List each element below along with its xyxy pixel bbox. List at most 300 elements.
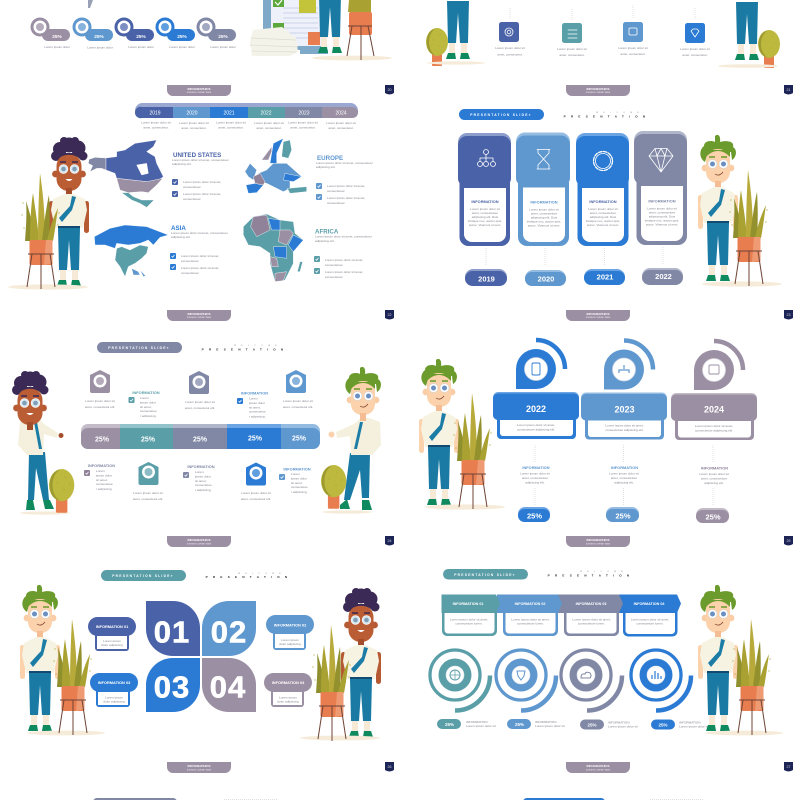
info box 1: Lorem ipsum dolor sit amet, bbox=[450, 618, 488, 622]
info text 1: amet, consectetuer bbox=[522, 476, 548, 480]
petal 03 bbox=[146, 658, 200, 712]
arrow 4: INFORMATION 04 bbox=[634, 602, 665, 606]
year pill 2019 bbox=[465, 269, 507, 286]
captions above and below: amet, consectetur elit. bbox=[283, 405, 313, 409]
information block bottom 1: r adipiscing. bbox=[96, 487, 113, 491]
heading text bbox=[564, 112, 650, 118]
card 2022: purus. Vivamus ut sem. bbox=[646, 222, 678, 226]
information block top 2: r adipiscing. bbox=[249, 414, 266, 418]
icon tile 4: Lorem ipsum dolor sit bbox=[680, 47, 710, 51]
footer tab bbox=[566, 310, 630, 321]
icon pill 1 bbox=[30, 18, 70, 41]
percent pill 2 bbox=[606, 507, 639, 522]
block: africa: consectetuer. bbox=[325, 263, 344, 267]
timeline captions: amet, consectetur. bbox=[143, 126, 169, 130]
panel: slide 24 percentage bar bbox=[12, 342, 394, 547]
information block top 1: r adipiscing. bbox=[140, 414, 157, 418]
icon tile 3 bbox=[618, 5, 648, 56]
year pill 2019: 2019 bbox=[478, 274, 495, 284]
panel: slide 22 world maps bbox=[8, 103, 394, 321]
heading pill: PRESENTATION SLIDE» bbox=[112, 574, 174, 578]
partial next slide headers bbox=[93, 798, 704, 800]
ring 1 bbox=[430, 650, 490, 710]
card 2022 bbox=[634, 131, 687, 245]
shadow left bbox=[427, 61, 485, 65]
arrow 1: INFORMATION 01 bbox=[453, 602, 483, 606]
block: europe: EUROPE bbox=[317, 155, 343, 162]
information block top 2: ipsum dolor bbox=[249, 401, 265, 405]
heading pill bbox=[443, 569, 528, 580]
info text 3 bbox=[699, 466, 729, 485]
info box 02: INFORMATION 02 bbox=[274, 622, 307, 628]
timeline captions: Lorem ipsum dolor sit bbox=[288, 120, 318, 124]
block: africa: AFRICA bbox=[315, 228, 339, 236]
year timeline bar: 2024 bbox=[335, 110, 347, 116]
block: africa bbox=[314, 228, 372, 279]
year box 2022 bbox=[493, 392, 579, 439]
percent label 2: Lorem ipsum dolor sit bbox=[535, 724, 565, 728]
info text 3: Lorem ipsum dolor sit bbox=[699, 472, 729, 476]
information block bottom 3: sit amet, bbox=[291, 481, 303, 485]
card 2019: amet, consectetuer bbox=[472, 211, 498, 215]
footer tab bbox=[167, 310, 231, 321]
year box 2023 bbox=[581, 392, 667, 440]
icon tile 1 bbox=[495, 8, 525, 56]
block: asia: Lorem ipsum dolor sit amet, consectetuer bbox=[171, 231, 228, 235]
plant bbox=[27, 619, 105, 735]
captions above and below: Lorem ipsum dolor sit bbox=[85, 399, 115, 403]
footer tab: BUSINESS COMPANY NAME bbox=[586, 768, 611, 772]
footer tab: INFOGRAPHICS bbox=[586, 764, 610, 768]
info box 4 bbox=[623, 600, 678, 636]
year timeline bar: 2021 bbox=[223, 110, 235, 116]
card 2019: INFORMATION bbox=[471, 199, 499, 204]
page badge bbox=[385, 762, 394, 772]
petal 01: 01 bbox=[154, 614, 190, 650]
page badge: 21 bbox=[786, 88, 790, 92]
hex icon 3 bbox=[286, 370, 306, 393]
icon pill 4 bbox=[156, 18, 195, 41]
information block bottom 2 bbox=[183, 464, 215, 492]
heading text: WELCOME bbox=[238, 573, 286, 575]
block: africa: Lorem ipsum dolor sit amet, bbox=[325, 270, 363, 274]
block: europe: adipiscing elit. bbox=[316, 165, 336, 169]
icon tile 4: amet, consectetur. bbox=[682, 53, 708, 57]
icon pill 5: 25% bbox=[218, 34, 229, 40]
block: asia bbox=[170, 225, 228, 275]
info box 3 bbox=[564, 600, 619, 636]
info text 3: adipiscing elit. bbox=[704, 481, 724, 485]
block: united states: Lorem ipsum dolor sit amet, bbox=[183, 180, 221, 184]
card 2019: tristique nec, auctor quis, bbox=[468, 219, 502, 223]
connectors bbox=[486, 247, 663, 266]
cactus left bbox=[49, 469, 74, 513]
year box 2023: Lorem ipsum dolor sit amet, bbox=[605, 424, 644, 428]
card 2022: tristique nec, auctor quis, bbox=[645, 218, 679, 222]
information block bottom 1: Lorem bbox=[96, 469, 105, 473]
information block bottom 2: INFORMATION bbox=[187, 464, 215, 469]
captions above and below: amet, consectetur elit. bbox=[185, 406, 215, 410]
info box 01 bbox=[88, 617, 136, 651]
marker 2023 bbox=[604, 340, 653, 390]
card 2020 bbox=[516, 132, 570, 246]
heading text: WELCOME bbox=[234, 345, 282, 347]
year pill 2021: 2021 bbox=[597, 272, 613, 282]
information block top 1 bbox=[128, 390, 160, 418]
icon pill 1: 25% bbox=[52, 34, 63, 40]
character: dark boy pointing bbox=[12, 371, 70, 515]
panel: slide 21 icons bbox=[426, 1, 793, 96]
block: europe: Lorem ipsum dolor sit amet, consectetuer bbox=[316, 161, 373, 165]
info text 1: INFORMATION bbox=[522, 465, 550, 470]
petal 01 bbox=[146, 601, 200, 656]
year box 2024: consectetuer adipiscing elit. bbox=[695, 428, 733, 432]
percent pill 3: 25% bbox=[705, 512, 721, 522]
block: africa: adipiscing elit. bbox=[315, 239, 335, 243]
footer tab: BUSINESS COMPANY NAME bbox=[187, 91, 212, 94]
page badge: 20 bbox=[388, 88, 392, 92]
icon tile 3: Lorem ipsum dolor sit bbox=[618, 46, 648, 50]
information block bottom 1: INFORMATION bbox=[88, 463, 115, 468]
year timeline bar bbox=[135, 103, 358, 118]
info box 4: consectetuer lorem. bbox=[636, 622, 664, 626]
character legs bbox=[318, 0, 342, 53]
information block bottom 3: consectetue bbox=[291, 485, 308, 489]
heading text: PRESENTATION bbox=[202, 348, 288, 352]
panel: slide 23 year cards bbox=[458, 109, 793, 321]
card 2021: INFORMATION bbox=[589, 199, 617, 204]
block: europe: Lorem ipsum dolor sit amet, bbox=[327, 196, 365, 200]
block: united states: Lorem ipsum dolor sit amet, bbox=[183, 192, 221, 196]
percent label 4 bbox=[651, 720, 709, 730]
card 2020: tristique nec, auctor quis, bbox=[527, 220, 561, 224]
percent pill 1: 25% bbox=[527, 512, 542, 520]
footer tab: BUSINESS COMPANY NAME bbox=[586, 316, 611, 319]
panel: slide 27 arrows and rings bbox=[430, 569, 793, 773]
percent label 1: Lorem ipsum dolor sit bbox=[466, 724, 496, 728]
information block top 1: Lorem bbox=[140, 396, 149, 400]
info box 3: Lorem ipsum dolor sit amet, bbox=[572, 618, 611, 622]
year box 2024 bbox=[671, 393, 757, 440]
info text 2: INFORMATION bbox=[611, 465, 638, 470]
year pill 2020: 2020 bbox=[538, 274, 554, 284]
character: dark-haired boy bbox=[49, 137, 89, 286]
block: united states: Lorem ipsum dolor sit amet, consectetuer bbox=[172, 158, 229, 162]
card 2019: Lorem ipsum dolor sit bbox=[470, 207, 500, 211]
percent label 1: INFORMATION bbox=[466, 720, 487, 724]
page badge: 27 bbox=[786, 765, 790, 769]
info box 04: dolor adipiscing bbox=[277, 700, 299, 704]
captions: Lorem ipsum dolor bbox=[87, 46, 113, 50]
captions above and below: amet, consectetur elit. bbox=[133, 497, 163, 501]
card 2022: Lorem ipsum dolor sit bbox=[647, 206, 677, 210]
captions above and below: Lorem ipsum dolor sit bbox=[241, 491, 271, 495]
timeline captions: Lorem ipsum dolor sit bbox=[141, 120, 171, 124]
stacked percent bar: 25% bbox=[292, 436, 307, 442]
ring 4 bbox=[631, 650, 691, 710]
block: europe: consectetuer. bbox=[327, 201, 346, 205]
percent label 1 bbox=[437, 719, 496, 729]
info text 3: INFORMATION bbox=[701, 466, 728, 470]
information block bottom 2: r adipiscing. bbox=[195, 488, 212, 492]
icon pill 2: 25% bbox=[94, 34, 105, 40]
panel: slide 25 year headers bbox=[419, 340, 793, 547]
information block bottom 2: sit amet, bbox=[195, 479, 207, 483]
information block bottom 2: consectetue bbox=[195, 483, 212, 487]
information block bottom 1: sit amet, bbox=[96, 478, 108, 482]
card 2019: adipiscing elit. Duis bbox=[472, 215, 499, 219]
icon tile 3: amet, consectetur. bbox=[620, 52, 646, 56]
card 2022: INFORMATION bbox=[648, 198, 676, 204]
captions above and below: Lorem ipsum dolor sit bbox=[185, 400, 215, 404]
hex icon 4 bbox=[138, 462, 158, 485]
illustration: clipboard, paper stack bbox=[250, 0, 328, 56]
captions bbox=[44, 45, 236, 50]
page badge bbox=[385, 85, 394, 94]
block: asia: Lorem ipsum dolor sit amet, bbox=[181, 254, 219, 258]
year pill 2022 bbox=[642, 268, 683, 285]
captions above and below: Lorem ipsum dolor sit bbox=[283, 399, 313, 403]
card 2021: tristique nec, auctor quis, bbox=[586, 219, 620, 223]
marker 2022 bbox=[516, 340, 565, 389]
block: europe bbox=[316, 155, 373, 205]
decorative map fragment bbox=[88, 0, 93, 8]
page badge: 25 bbox=[786, 539, 790, 543]
percent label 4: Lorem ipsum dolor sit bbox=[679, 724, 709, 728]
icon pill 4: 25% bbox=[177, 34, 188, 40]
page badge: 24 bbox=[388, 539, 392, 543]
character: green boy bbox=[20, 585, 60, 731]
percent label 3: 25% bbox=[587, 722, 597, 728]
petal 04 bbox=[202, 658, 256, 712]
card 2021: purus. Vivamus ut sem. bbox=[587, 223, 619, 227]
petal 04: 04 bbox=[210, 670, 246, 704]
info box 01: Lorem ipsum bbox=[103, 639, 121, 643]
timeline captions: amet, consectetur. bbox=[218, 126, 244, 130]
footer tab bbox=[566, 85, 630, 96]
page badge: 23 bbox=[786, 313, 790, 317]
character: green-haired boy bbox=[698, 135, 738, 281]
captions: Lorem ipsum dolor bbox=[44, 45, 70, 49]
heading text bbox=[548, 571, 634, 578]
info text 2: adipiscing elit. bbox=[614, 480, 634, 484]
arrow 2 bbox=[497, 594, 562, 613]
information block top 2: Lorem bbox=[249, 396, 258, 400]
info text 2: amet, consectetuer bbox=[611, 476, 637, 480]
stacked percent bar: 25% bbox=[193, 436, 208, 444]
stacked percent bar: 25% bbox=[248, 436, 263, 442]
shadow right bbox=[718, 64, 778, 68]
block: europe: consectetuer. bbox=[327, 189, 346, 193]
heading text bbox=[206, 573, 292, 579]
plant on stand bbox=[312, 0, 392, 60]
captions above and below bbox=[85, 399, 313, 501]
timeline captions: amet, consectetur. bbox=[290, 126, 316, 130]
timeline captions: amet, consectetur. bbox=[328, 126, 354, 130]
card 2022: adipiscing elit. Duis bbox=[649, 214, 676, 218]
footer tab bbox=[566, 762, 630, 773]
year box 2024: 2024 bbox=[704, 404, 724, 414]
info box 2: consectetuer lorem. bbox=[517, 622, 544, 626]
panel: slide 20 progress circles bbox=[30, 0, 394, 96]
card 2021: adipiscing elit. Duis bbox=[590, 215, 617, 219]
card 2019 bbox=[458, 133, 511, 246]
percent label 1: 25% bbox=[445, 722, 454, 727]
block: united states: consectetuer. bbox=[183, 185, 202, 189]
information block bottom 2: ipsum dolor bbox=[195, 474, 211, 478]
footer tab: INFOGRAPHICS bbox=[586, 538, 610, 542]
block: africa: Lorem ipsum dolor sit amet, consectetuer bbox=[315, 234, 372, 238]
arrow 1 bbox=[442, 594, 500, 613]
ring 2 bbox=[496, 650, 556, 710]
hex icon 5 bbox=[246, 462, 266, 486]
footer tab: BUSINESS COMPANY NAME bbox=[187, 316, 212, 319]
footer tab: INFOGRAPHICS bbox=[586, 312, 610, 316]
arrow 4 bbox=[618, 594, 681, 613]
info text 2: Lorem ipsum dolor sit bbox=[609, 472, 639, 476]
footer tab: INFOGRAPHICS bbox=[187, 312, 211, 316]
captions: Lorem ipsum dolor bbox=[128, 45, 154, 49]
year timeline bar: 2022 bbox=[260, 110, 272, 116]
information block top 1: INFORMATION bbox=[132, 390, 160, 395]
heading pill bbox=[97, 342, 182, 353]
info box 04: INFORMATION 04 bbox=[272, 680, 305, 685]
year box 2023: 2023 bbox=[614, 404, 635, 414]
footer tab: BUSINESS COMPANY NAME bbox=[187, 542, 212, 546]
percent pill 2: 25% bbox=[615, 512, 631, 520]
captions above and below: Lorem ipsum dolor sit bbox=[133, 491, 163, 495]
info box 03: INFORMATION 03 bbox=[98, 680, 131, 685]
character: green boy bbox=[419, 359, 459, 505]
footer tab bbox=[566, 536, 630, 547]
card 2021 bbox=[576, 133, 629, 246]
info box 1: consectetuer lorem. bbox=[455, 622, 483, 626]
footer tab: INFOGRAPHICS bbox=[187, 764, 211, 768]
percent label 2: INFORMATION bbox=[535, 720, 556, 724]
plant bbox=[425, 393, 505, 510]
footer tab: INFOGRAPHICS bbox=[187, 538, 211, 542]
card 2020: purus. Vivamus ut sem. bbox=[528, 224, 560, 228]
heading pill: PRESENTATION SLIDE» bbox=[454, 573, 516, 577]
footer tab bbox=[167, 762, 231, 773]
map: europe bbox=[245, 138, 307, 193]
card 2020: adipiscing elit. Duis bbox=[531, 216, 558, 220]
card 2022: amet, consectetuer bbox=[649, 210, 675, 214]
info box 4: Lorem ipsum dolor sit amet, bbox=[631, 618, 669, 622]
legs left bbox=[446, 1, 470, 59]
info box 02: dolor adipiscing bbox=[279, 642, 301, 646]
map: africa bbox=[243, 214, 303, 282]
year box 2022: Lorem ipsum dolor sit amet, bbox=[517, 423, 555, 427]
cactus right bbox=[758, 30, 780, 68]
information block top 1: ipsum dolor bbox=[140, 400, 156, 404]
icon tile 4 bbox=[680, 8, 710, 57]
info box 04: Lorem ipsum bbox=[279, 696, 297, 700]
info box 03 bbox=[90, 673, 138, 707]
panel: slide 26 petals bbox=[20, 570, 394, 773]
card 2020: INFORMATION bbox=[530, 200, 558, 204]
cactus right bbox=[321, 465, 346, 509]
timeline captions: amet, consectetur. bbox=[181, 126, 207, 130]
footer tab: BUSINESS COMPANY NAME bbox=[586, 542, 611, 546]
heading text: WELCOME bbox=[596, 112, 644, 114]
information block bottom 3: r adipiscing. bbox=[291, 490, 308, 494]
footer tab bbox=[167, 536, 231, 547]
page badge bbox=[784, 85, 793, 94]
info box 1 bbox=[442, 600, 497, 636]
heading pill: PRESENTATION SLIDE» bbox=[108, 346, 170, 350]
captions: Lorem ipsum dolor bbox=[169, 45, 195, 49]
info box 3: consectetuer lorem. bbox=[578, 622, 605, 626]
percent label 3 bbox=[580, 720, 638, 730]
page badge: 22 bbox=[388, 313, 392, 317]
information block bottom 2: Lorem bbox=[195, 470, 204, 474]
plant bbox=[300, 625, 380, 741]
info text 1 bbox=[520, 465, 550, 484]
card 2021: Lorem ipsum dolor sit bbox=[588, 207, 618, 211]
information block bottom 3: Lorem bbox=[291, 472, 300, 476]
information block top 2: sit amet, bbox=[249, 406, 261, 410]
icon tile 2: Lorem ipsum dolor sit bbox=[557, 47, 587, 51]
heading pill bbox=[101, 570, 186, 581]
petal 03: 03 bbox=[154, 670, 190, 704]
information block bottom 1 bbox=[84, 463, 115, 491]
information block bottom 3: ipsum dolor bbox=[291, 476, 307, 480]
info box 2 bbox=[503, 600, 558, 636]
icon pill 3 bbox=[114, 18, 154, 41]
hex icon 1 bbox=[90, 370, 110, 393]
percent pill 3 bbox=[696, 508, 729, 523]
heading text: WELCOME bbox=[580, 571, 628, 573]
info text 1: adipiscing elit. bbox=[525, 480, 545, 484]
character: dark boy bbox=[341, 588, 381, 737]
heading text: PRESENTATION bbox=[206, 575, 292, 579]
stacked percent bar bbox=[81, 424, 320, 449]
information block bottom 1: ipsum dolor bbox=[96, 474, 112, 478]
timeline captions: Lorem ipsum dolor sit bbox=[326, 121, 356, 125]
info box 02 bbox=[266, 615, 314, 650]
block: asia: consectetuer. bbox=[181, 259, 200, 263]
plant bbox=[702, 170, 782, 287]
stacked percent bar: 25% bbox=[141, 436, 156, 444]
information block top 1: consectetue bbox=[140, 409, 157, 413]
heading pill: PRESENTATION SLIDE» bbox=[470, 113, 532, 117]
info text 1: Lorem ipsum dolor sit bbox=[520, 472, 550, 476]
percent pill 1 bbox=[518, 507, 550, 522]
heading text: PRESENTATION bbox=[564, 114, 650, 118]
plant bbox=[705, 619, 783, 735]
timeline captions: Lorem ipsum dolor sit bbox=[216, 120, 246, 124]
arrow 3 bbox=[557, 594, 623, 613]
page badge bbox=[784, 310, 793, 320]
legs right bbox=[735, 2, 759, 60]
connectors bbox=[535, 445, 713, 505]
character: green boy bbox=[698, 585, 738, 731]
year timeline bar: 2023 bbox=[298, 110, 310, 116]
ring 3 bbox=[561, 650, 622, 710]
page badge bbox=[385, 310, 394, 320]
year timeline bar: 2020 bbox=[186, 110, 198, 116]
information block bottom 3 bbox=[279, 466, 311, 494]
year timeline bar: 2019 bbox=[149, 110, 161, 116]
character: green boy pointing bbox=[322, 367, 381, 514]
information block bottom 3: INFORMATION bbox=[283, 466, 311, 472]
percent label 4: 25% bbox=[658, 722, 668, 728]
heading text: PRESENTATION bbox=[548, 574, 634, 578]
card 2020: amet, consectetuer bbox=[531, 212, 557, 216]
information block top 2 bbox=[237, 390, 268, 418]
footer tab bbox=[167, 85, 231, 96]
